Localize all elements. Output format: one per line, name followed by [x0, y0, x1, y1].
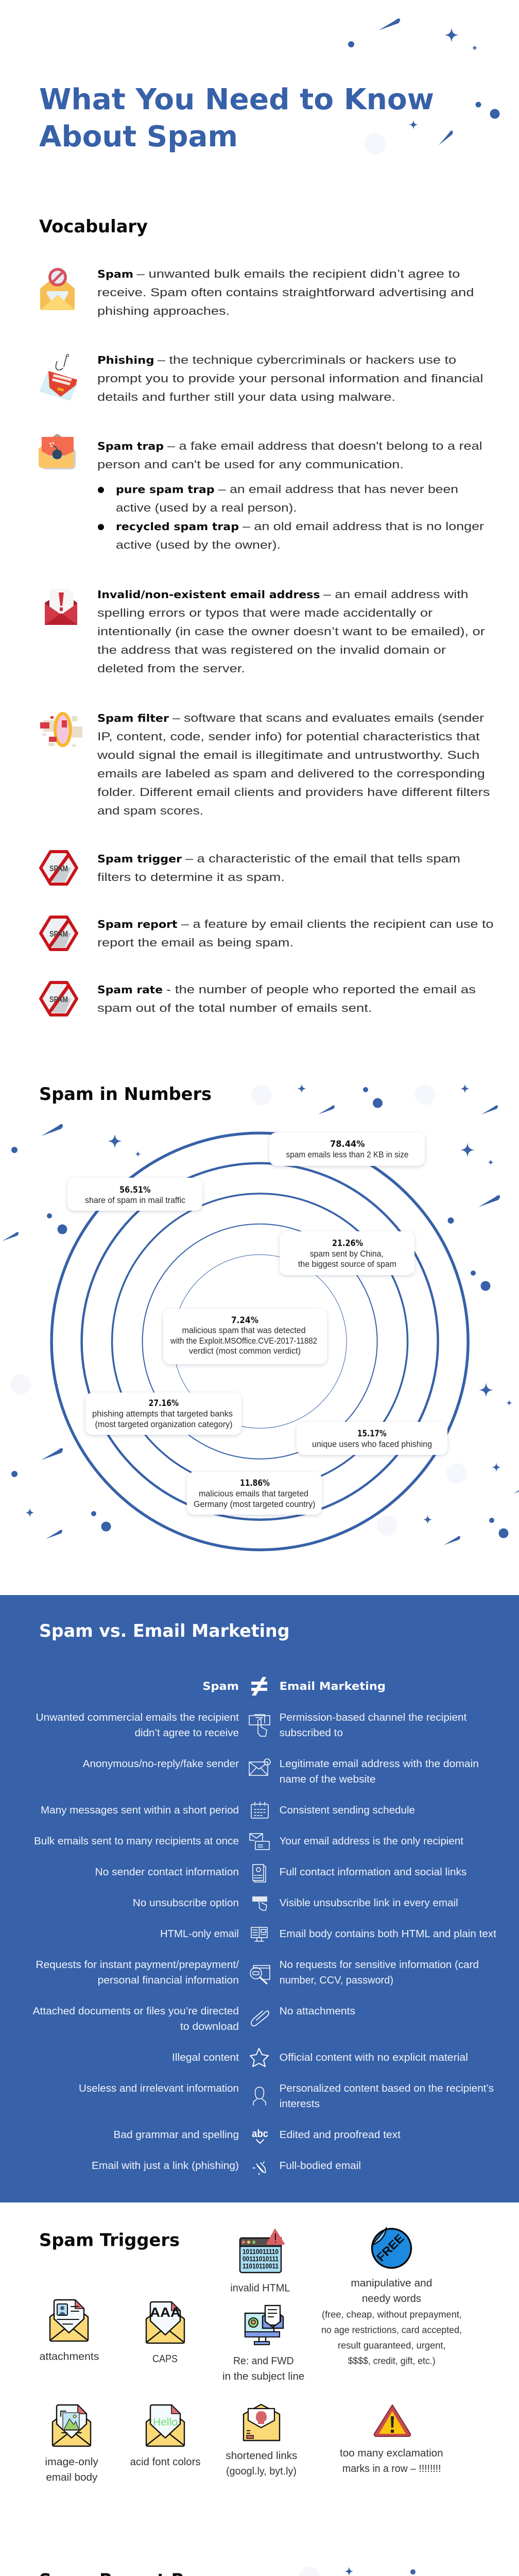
text: Invalid email definition: intentionally (in case the owner doesn’t want to be emailed), or	[97, 625, 485, 638]
row: permission: didn’t agree to receive	[135, 1727, 239, 1739]
row: permission	[36, 1712, 467, 1739]
text: Spam rate definition	[97, 983, 476, 1014]
row: payment: personal financial information	[98, 1975, 239, 1986]
card: 56.51%	[67, 1178, 202, 1211]
bullet: pure spam trap: active (used by a real person).	[116, 501, 297, 514]
trigger: manipulative and needy words: no age restrictions, card accepted,	[321, 2325, 462, 2335]
row: permission: Permission-based channel the recipient	[280, 1712, 467, 1723]
icon: phishing hook	[39, 354, 77, 401]
decoration: sparkles around rings	[2, 1084, 519, 1545]
row: payment	[36, 1959, 479, 1986]
heading: Spam Triggers: Spam Triggers	[39, 2230, 180, 2250]
row: personalized: interests	[280, 2098, 320, 2110]
trigger: too many exclamation marks	[340, 2405, 443, 2475]
trigger: manipulative and needy words: result guaranteed, urgent,	[338, 2340, 446, 2350]
text: Phishing definition: details and further still your data using malware.	[97, 391, 395, 403]
icon: no spam sign 2: SPAM	[49, 930, 68, 939]
icon: no spam sign 1: SPAM	[49, 865, 68, 873]
row: content: Official content with no explicit material	[280, 2052, 468, 2063]
text: Invalid email definition	[97, 588, 485, 675]
row: content	[172, 2048, 468, 2066]
panel: Spam vs. Email Marketing	[0, 1595, 519, 2202]
text: Spam trap definition: person and can't be used for any communication.	[97, 458, 404, 471]
trigger: Re and FWD	[222, 2306, 304, 2382]
heading: Spam vs. Email Marketing: Spam vs. Email Marketing	[39, 1621, 289, 1641]
text: Invalid email definition: the address that was registered on the invalid domain or	[97, 643, 446, 656]
row: grammar	[113, 2128, 401, 2143]
icon: spam filter	[40, 714, 82, 747]
column headers: Email Marketing	[280, 1680, 386, 1692]
column headers: Spam	[202, 1680, 239, 1692]
row: permission: Unwanted commercial emails the recipient	[36, 1712, 239, 1723]
text: Invalid email definition: deleted from the server.	[97, 662, 245, 675]
trigger: invalid HTML: 11010110011	[243, 2262, 279, 2270]
text: Spam filter definition: Spam filter	[97, 712, 169, 724]
text: Spam trigger definition: Spam trigger	[97, 853, 182, 865]
trigger: Re and FWD: in the subject line	[222, 2370, 304, 2382]
text: Spam filter definition: would signal the email is illegitimate and untrustworthy. Such	[97, 749, 479, 761]
trigger: CAPS	[146, 2302, 184, 2365]
row: payment: No requests for sensitive information (card	[280, 1959, 479, 1971]
text: Spam filter definition: emails are labeled as spam and delivered to the corresponding	[97, 767, 485, 780]
trigger: invalid HTML: 00111010111	[243, 2255, 279, 2263]
title: About Spam	[39, 120, 238, 154]
icon: no spam sign 3: SPAM	[49, 995, 68, 1004]
trigger: acid font colors: acid font colors	[130, 2456, 201, 2468]
text: Spam filter definition: – software that scans and evaluates emails (sender	[172, 711, 484, 724]
text: Spam report definition: Spam report	[97, 918, 178, 930]
row: link	[92, 2160, 361, 2175]
text: Spam rate definition: Spam rate	[97, 984, 163, 996]
card: 21.26%: 21.26%	[332, 1239, 363, 1249]
card: 78.44%: spam emails less than 2 KB in size	[286, 1150, 409, 1159]
row: unsubscribe: No unsubscribe option	[133, 1897, 239, 1909]
bullet: recycled spam trap: – an old email address that is no longer	[243, 520, 484, 533]
trigger: Re and FWD: Re: and FWD	[233, 2355, 294, 2367]
text: Phishing definition	[97, 353, 483, 403]
row: payment: Requests for instant payment/prepayment/	[36, 1959, 239, 1971]
trigger: too many exclamation marks: marks in a row – !!!!!!!!	[342, 2463, 441, 2475]
card: 21.26%: spam sent by China,	[310, 1249, 384, 1259]
row: sender: Legitimate email address with the domain	[280, 1758, 479, 1770]
row: attachments	[33, 2006, 355, 2032]
trigger: invalid HTML: invalid HTML	[230, 2282, 290, 2294]
row: permission: subscribed to	[280, 1727, 343, 1739]
bullet: recycled spam trap: active (used by the owner).	[116, 538, 281, 551]
icon: invalid email	[45, 589, 77, 625]
text: Phishing definition: prompt you to provide your personal information and financial	[97, 372, 483, 385]
decoration: title sparkles	[348, 19, 499, 155]
row: sender: Anonymous/no-reply/fake sender	[83, 1758, 239, 1770]
trigger: acid font colors	[130, 2405, 201, 2468]
title: What You Need to Know	[39, 83, 434, 116]
chart: concentric rings with stat cards	[51, 1132, 468, 1550]
text: Spam filter definition: folder. Different email clients and providers have different filters	[97, 786, 490, 799]
row: content: Illegal content	[172, 2052, 239, 2063]
text: Phishing definition: – the technique cybercriminals or hackers use to	[158, 353, 456, 366]
trigger: manipulative and needy words: $$$$, credit, gift, etc.)	[348, 2355, 436, 2366]
trigger: shortened links: shortened links	[226, 2450, 297, 2462]
row: grammar: abc	[252, 2128, 268, 2140]
card: 15.17%	[297, 1422, 447, 1455]
heading: Spam in Numbers: Spam in Numbers	[39, 1084, 212, 1105]
text: Spam definition: – unwanted bulk emails the recipient didn’t agree to	[137, 267, 460, 280]
text: Spam trigger definition: – a characteristic of the email that tells spam	[185, 852, 460, 865]
card: 78.44%	[269, 1132, 425, 1166]
text: Spam rate definition: - the number of people who reported the email as	[166, 983, 476, 996]
column headers	[202, 1677, 386, 1696]
text: Spam filter definition	[97, 711, 490, 817]
text: Spam filter definition: and spam scores.	[97, 804, 203, 817]
text: Spam trap definition: Spam trap	[97, 440, 164, 452]
icon: no spam sign 3	[41, 982, 77, 1015]
icon: spam trap bomb	[39, 434, 76, 469]
card: 21.26%	[280, 1231, 414, 1275]
text: Spam trigger definition: filters to determine it as spam.	[97, 871, 285, 884]
text: Spam definition	[97, 267, 474, 317]
row: attachments: No attachments	[280, 2006, 355, 2017]
trigger: attachments: attachments	[39, 2351, 99, 2363]
text: Spam definition: phishing approaches.	[97, 304, 230, 317]
card: 15.17%: unique users who faced phishing	[312, 1439, 432, 1449]
row: schedule: Many messages sent within a short period	[41, 1805, 239, 1816]
card: 27.16%	[85, 1393, 241, 1435]
card: 11.86%: 11.86%	[240, 1478, 270, 1488]
rings	[51, 1133, 468, 1550]
trigger: shortened links: (googl.ly, byt.ly)	[226, 2465, 297, 2477]
row: personalized	[79, 2083, 494, 2110]
text: Phishing definition: Phishing	[97, 354, 154, 366]
trigger: attachments	[39, 2300, 99, 2363]
card: 21.26%: the biggest source of spam	[298, 1260, 396, 1269]
text: Spam rate definition: spam out of the total number of emails sent.	[97, 1002, 372, 1014]
row: link: Email with just a link (phishing)	[92, 2160, 239, 2172]
row: link: Full-bodied email	[280, 2160, 361, 2172]
trigger: manipulative and needy words	[321, 2228, 462, 2366]
row: recipients	[34, 1834, 463, 1850]
card: 7.24%	[163, 1309, 327, 1364]
card: 56.51%: share of spam in mail traffic	[85, 1196, 185, 1205]
bullet: pure spam trap	[98, 483, 458, 514]
row: schedule	[41, 1802, 415, 1818]
trigger: manipulative and needy words: manipulative and	[351, 2277, 432, 2289]
card: 7.24%: verdict (most common verdict)	[189, 1347, 301, 1356]
row: recipients: Bulk emails sent to many recipients at once	[34, 1836, 239, 1847]
trigger: image-only body: image-only	[45, 2456, 99, 2468]
row: contact	[95, 1865, 466, 1882]
card: 7.24%: with the Exploit.MSOffice.CVE-2017-11882	[170, 1336, 317, 1346]
row: personalized: Useless and irrelevant information	[79, 2083, 239, 2094]
row: unsubscribe	[133, 1896, 458, 1910]
icon: no spam sign 1	[41, 852, 77, 884]
card: 11.86%	[187, 1472, 322, 1515]
row: payment: number, CCV, password)	[280, 1975, 393, 1986]
row: sender	[83, 1758, 479, 1785]
trigger: image-only body	[45, 2405, 99, 2483]
text: Invalid email definition: – an email address with	[323, 588, 469, 601]
trigger: CAPS: AAA	[150, 2304, 181, 2320]
bullet: pure spam trap: – an email address that has never been	[218, 483, 458, 496]
card: 11.86%: malicious emails that targeted	[199, 1489, 308, 1499]
card: 27.16%: 27.16%	[149, 1398, 179, 1409]
text: Spam definition: receive. Spam often contains straightforward advertising and	[97, 286, 474, 299]
card: 56.51%: 56.51%	[119, 1185, 150, 1195]
text: Spam report definition	[97, 918, 493, 949]
text: Spam filter definition: IP, content, code, sender info) for potential characteristics that	[97, 730, 480, 743]
trigger: too many exclamation marks: too many exclamation	[340, 2447, 443, 2459]
text: Spam trap definition	[97, 439, 484, 551]
card: 15.17%: 15.17%	[357, 1429, 387, 1439]
row: contact: No sender contact information	[95, 1867, 239, 1878]
row: schedule: Consistent sending schedule	[280, 1805, 415, 1816]
card: 11.86%: Germany (most targeted country)	[194, 1500, 315, 1509]
text: Spam report definition: – a feature by email clients the recipient can use to	[181, 918, 493, 930]
trigger: manipulative and needy words: FREE	[374, 2231, 407, 2264]
trigger: manipulative and needy words: needy words	[362, 2293, 421, 2304]
trigger: manipulative and needy words: (free, cheap, without prepayment,	[322, 2309, 462, 2319]
decoration: report sparkles	[299, 2567, 430, 2576]
row: grammar: Bad grammar and spelling	[113, 2129, 239, 2141]
title	[39, 83, 434, 154]
card: 27.16%: phishing attempts that targeted banks	[92, 1410, 233, 1419]
row: sender: name of the website	[280, 1774, 376, 1785]
row: grammar: Edited and proofread text	[280, 2129, 401, 2141]
text: Invalid email definition: spelling errors or typos that were made accidentally or	[97, 606, 432, 619]
bullet: pure spam trap: pure spam trap	[116, 483, 215, 496]
bullet: recycled spam trap: recycled spam trap	[116, 520, 239, 533]
text: Spam report definition: report the email as being spam.	[97, 936, 293, 949]
card: 27.16%: (most targeted organization category)	[95, 1420, 233, 1429]
text: Spam trigger definition	[97, 852, 460, 884]
text: Spam trap definition: – a fake email address that doesn't belong to a real	[167, 439, 482, 452]
icon: spam envelope	[40, 268, 75, 310]
bullet: recycled spam trap	[98, 520, 484, 551]
trigger: acid font colors: Hello	[153, 2417, 178, 2428]
trigger: shortened links	[226, 2404, 297, 2477]
row: html: Email body contains both HTML and plain text	[280, 1928, 496, 1940]
card: 7.24%: malicious spam that was detected	[182, 1326, 306, 1335]
row: attachments: Attached documents or files you’re directed	[33, 2006, 239, 2017]
row: attachments: to download	[180, 2021, 239, 2032]
card: 7.24%: 7.24%	[231, 1315, 258, 1326]
trigger: invalid HTML: 10110011110	[243, 2247, 279, 2256]
row: html: HTML-only email	[160, 1928, 239, 1940]
trigger: image-only body: email body	[46, 2471, 98, 2483]
icon: no spam sign 2	[41, 917, 77, 950]
trigger: invalid HTML	[230, 2228, 290, 2294]
heading: Vocabulary: Vocabulary	[39, 216, 148, 237]
row: contact: Full contact information and social links	[280, 1867, 466, 1878]
row: recipients: Your email address is the only recipient	[280, 1836, 463, 1847]
trigger: CAPS: CAPS	[152, 2353, 178, 2365]
card: 78.44%: 78.44%	[330, 1139, 365, 1149]
row: html	[160, 1927, 496, 1941]
row: personalized: Personalized content based on the recipient’s	[280, 2083, 494, 2094]
text: Invalid email definition: Invalid/non-existent email address	[97, 588, 320, 601]
row: unsubscribe: Visible unsubscribe link in every email	[280, 1897, 458, 1909]
text: Spam definition: Spam	[97, 268, 133, 280]
